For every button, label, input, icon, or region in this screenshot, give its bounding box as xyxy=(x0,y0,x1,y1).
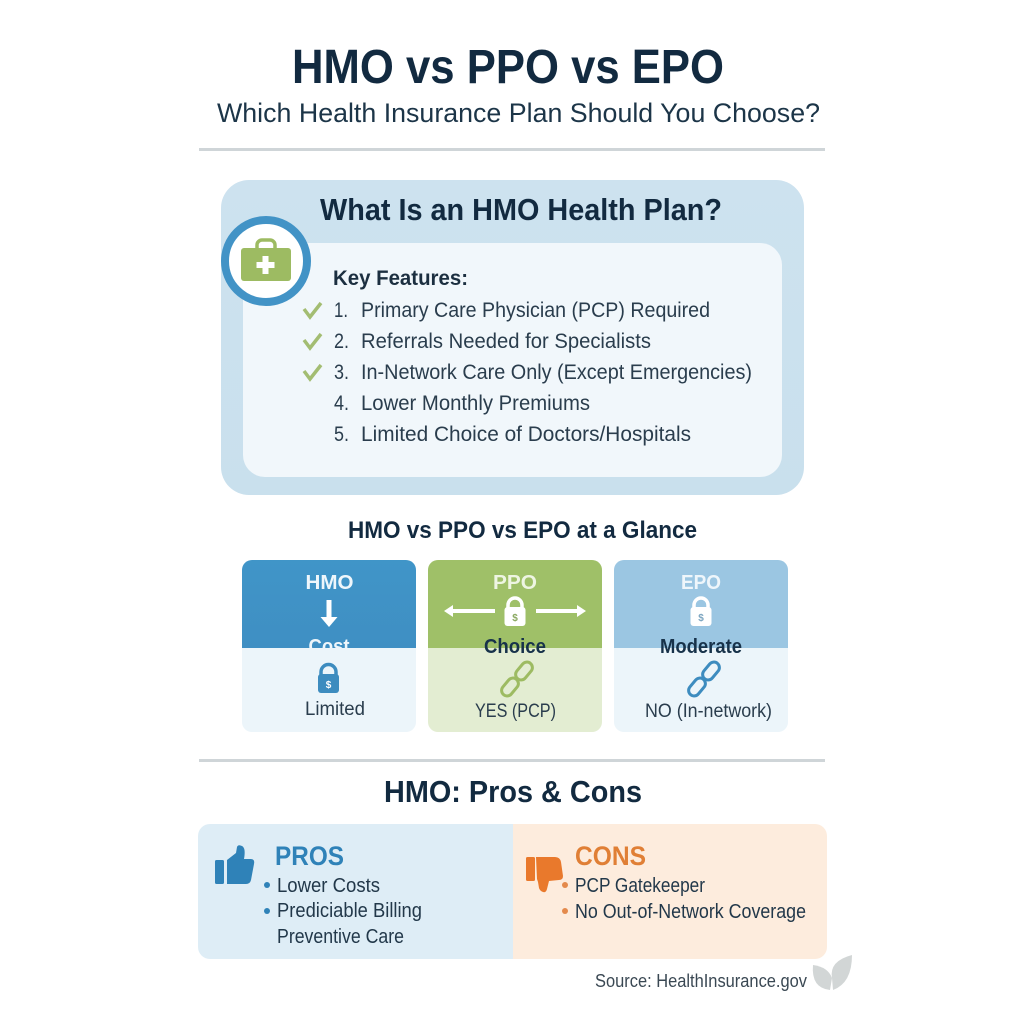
feature list xyxy=(334,298,752,446)
card: PPO xyxy=(428,560,602,732)
card: HMO: Cost xyxy=(308,636,350,658)
card: HMO: HMO xyxy=(306,572,354,594)
feature list: Referrals Needed for Specialists xyxy=(361,329,651,353)
card: HMO: Limited xyxy=(305,699,365,720)
icon: white lock xyxy=(504,598,526,626)
card: HMO xyxy=(242,560,416,732)
icon: thumbs up xyxy=(215,845,254,884)
icon: green chain link xyxy=(499,660,535,698)
feature list: Primary Care Physician (PCP) Required xyxy=(361,298,710,322)
panel: pros xyxy=(198,824,513,959)
cons list: PCP Gatekeeper xyxy=(575,875,705,897)
icon: blue chain link xyxy=(686,660,722,698)
feature list: 3. xyxy=(334,360,349,384)
card: EPO: EPO xyxy=(681,572,721,594)
panel: cons xyxy=(513,824,827,959)
panel: what is an HMO xyxy=(221,180,804,495)
feature list: 5. xyxy=(334,422,349,446)
card: PPO: Choice xyxy=(484,636,546,658)
pros list: Prediciable Billing xyxy=(277,900,422,922)
icon: white lock xyxy=(690,598,712,626)
feature list: 4. xyxy=(334,391,349,415)
feature list: Limited Choice of Doctors/Hospitals xyxy=(361,422,691,446)
card: EPO: NO (In-network) xyxy=(645,701,772,722)
icon: thumbs down xyxy=(526,857,563,892)
feature list: In-Network Care Only (Except Emergencies) xyxy=(361,360,752,384)
feature list: 2. xyxy=(334,329,349,353)
icon: down arrow xyxy=(320,600,338,627)
panel: pros: PROS xyxy=(275,841,344,871)
title: HMO vs PPO vs EPO xyxy=(292,41,724,94)
key features heading: Key Features: xyxy=(333,267,468,290)
card: EPO xyxy=(614,560,788,732)
card: PPO: PPO xyxy=(493,572,537,594)
feature list: 1. xyxy=(334,298,348,322)
pros list: Preventive Care xyxy=(277,926,404,948)
cons list: No Out-of-Network Coverage xyxy=(575,901,806,923)
icon: white lock: $ xyxy=(698,613,704,624)
subtitle: Which Health Insurance Plan Should You Choose? xyxy=(217,98,820,128)
icon: check marks xyxy=(304,303,321,379)
pros list: Lower Costs xyxy=(277,875,380,897)
feature list: Lower Monthly Premiums xyxy=(361,391,590,415)
card: EPO: Moderate xyxy=(660,636,742,658)
card: PPO: YES (PCP) xyxy=(475,701,556,722)
icon: blue lock xyxy=(318,665,339,693)
icon: leaf xyxy=(813,955,852,990)
icon: white lock: $ xyxy=(512,613,518,624)
icon: medical briefcase xyxy=(225,220,307,302)
cons list xyxy=(562,875,806,923)
panel: cons: CONS xyxy=(575,841,646,871)
icon: blue lock: $ xyxy=(326,680,332,691)
panel heading: What Is an HMO Health Plan? xyxy=(320,192,722,227)
pros and cons heading: HMO: Pros & Cons xyxy=(384,774,642,809)
icon: two-way arrows xyxy=(444,605,586,617)
glance heading: HMO vs PPO vs EPO at a Glance xyxy=(348,517,697,544)
pros list xyxy=(264,875,422,948)
source note: Source: HealthInsurance.gov xyxy=(595,971,807,991)
